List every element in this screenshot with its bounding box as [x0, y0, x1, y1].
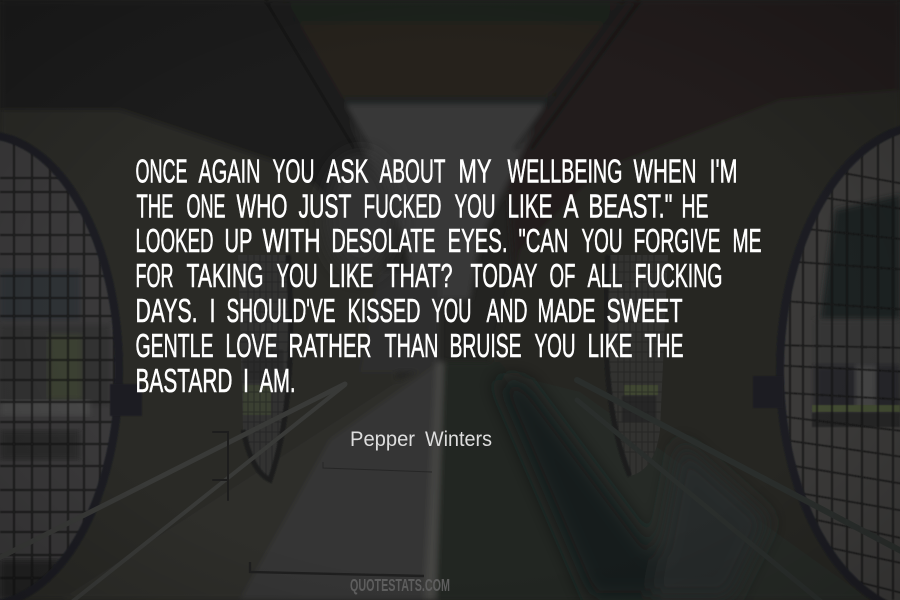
author name: Winters	[425, 428, 492, 451]
quote text: FOR	[136, 258, 174, 295]
right handrails	[577, 380, 900, 600]
quote text: MY	[458, 154, 492, 190]
quote text: KISSED	[348, 293, 420, 330]
quote text: UP	[224, 223, 252, 260]
quote text: YOU	[534, 328, 576, 365]
quote text: JUST	[298, 188, 352, 226]
quote text: SHOULD'VE	[226, 293, 336, 330]
left wall	[0, 110, 400, 600]
left handrails	[0, 384, 345, 600]
quote text: FORGIVE	[634, 223, 720, 260]
quote text: LIKE	[588, 328, 632, 365]
left mid arched window	[238, 255, 294, 484]
quote text: WHEN	[634, 154, 696, 190]
right mid arched window	[604, 255, 668, 476]
quote text: LIKE	[508, 188, 552, 226]
right bracket	[753, 376, 783, 408]
quote text: TAKING	[186, 258, 264, 295]
quote text: FUCKED	[364, 188, 442, 226]
quote text: HE	[682, 188, 708, 226]
quote text: A	[564, 188, 579, 226]
quote text: I	[243, 363, 249, 400]
right window frame	[780, 125, 900, 600]
quote text: YOU	[276, 258, 318, 295]
quote text: "CAN	[518, 223, 568, 260]
quote text: AGAIN	[198, 154, 260, 190]
quote text: YOU	[432, 293, 472, 330]
quote text: RATHER	[288, 328, 372, 365]
quote text: FUCKING	[634, 258, 722, 295]
quote text: YOU	[582, 223, 622, 260]
soft shading	[324, 155, 770, 600]
quote text: ALL	[588, 258, 622, 295]
quote text: MADE	[538, 293, 596, 330]
quote text: THE	[136, 188, 174, 226]
quote text: THE	[644, 328, 684, 365]
quote text: DAYS.	[136, 293, 198, 330]
right arched window	[753, 120, 900, 600]
left bracket	[110, 384, 142, 416]
quote text: YOU	[454, 188, 496, 226]
quote text: LOVE	[226, 328, 278, 365]
quote text: BEAST."	[588, 188, 672, 226]
left window frame	[0, 135, 119, 600]
quote text: ASK	[326, 154, 368, 190]
quote text: TODAY	[470, 258, 538, 295]
quote text: ABOUT	[380, 154, 446, 190]
floor seams	[250, 462, 432, 576]
quote text: I	[210, 293, 216, 330]
ceiling	[0, 0, 900, 360]
right ground	[500, 372, 870, 600]
quote text: AND	[486, 293, 528, 330]
ceiling beams	[265, 0, 640, 150]
quote text: WELLBEING	[508, 154, 622, 190]
quote text: AM.	[260, 363, 296, 400]
quote text: EYES.	[448, 223, 508, 260]
sky opening	[343, 104, 545, 300]
walkway	[60, 362, 440, 600]
quote text	[136, 154, 762, 400]
quote text: DESOLATE	[332, 223, 436, 260]
quote text: THAN	[384, 328, 438, 365]
quote text: BRUISE	[450, 328, 522, 365]
quote text: ONCE	[136, 154, 188, 190]
author name	[350, 428, 492, 451]
right mid window frame	[606, 255, 630, 476]
right wall	[480, 90, 900, 600]
quote text: WHO	[236, 188, 288, 226]
watermark: QUOTESTATS.COM	[350, 575, 450, 595]
quote text: BASTARD	[136, 363, 232, 400]
quote text: GENTLE	[136, 328, 214, 365]
quote text: SWEET	[606, 293, 682, 330]
quote text: YOU	[272, 154, 314, 190]
quote text: OF	[550, 258, 576, 295]
quote text: I'M	[710, 154, 738, 190]
quote text: WITH	[262, 223, 320, 260]
quote text: ONE	[186, 188, 226, 226]
quote text: LOOKED	[136, 223, 214, 260]
quote text: THAT?	[386, 258, 452, 295]
quote text: LIKE	[328, 258, 374, 295]
left arched window	[0, 130, 142, 600]
planting strip	[430, 362, 700, 600]
quote text: ME	[732, 223, 762, 260]
kerb	[424, 362, 444, 600]
left mid window frame	[243, 255, 291, 480]
author name: Pepper	[350, 428, 415, 451]
